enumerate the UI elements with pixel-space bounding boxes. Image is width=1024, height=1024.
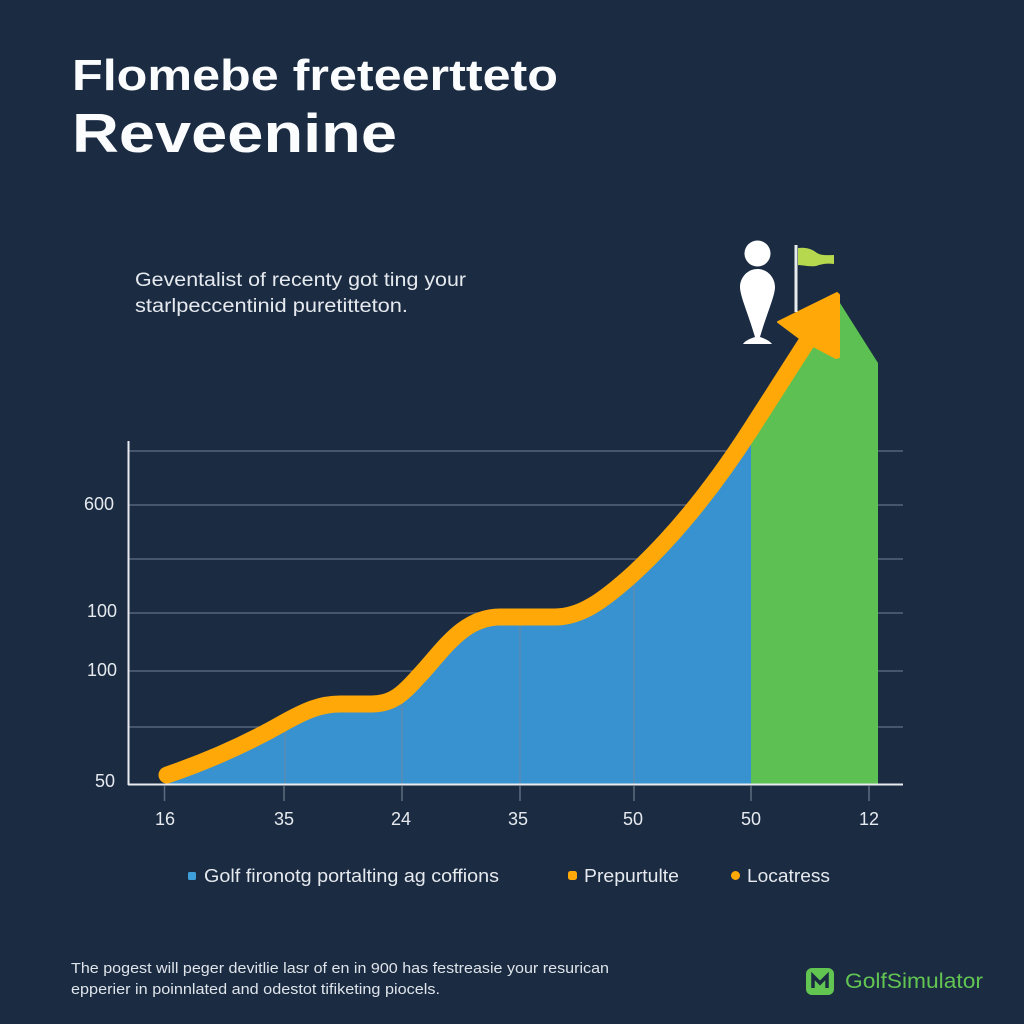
icon: flag [794,245,834,312]
footer note [71,960,609,998]
x-axis labels: 16 [155,809,175,829]
legend item: orange dot: Locatress [747,866,830,886]
logo: GolfSimulator [845,969,983,993]
description text [135,270,467,317]
legend item: orange square: Prepurtulte [584,866,679,886]
x-axis labels: 50 [623,809,643,829]
description text: Geventalist of recenty got ting your [135,270,467,291]
logo [806,968,983,995]
footer note: The pogest will peger devitlie lasr of en in 900 has festreasie your resurican [71,960,609,977]
green area [751,303,878,784]
y-axis labels: 100 [87,660,117,680]
x-axis labels: 50 [741,809,761,829]
footer note: epperier in poinnlated and odestot tifiketing piocels. [71,981,440,998]
axes [128,441,903,785]
blue area [167,430,751,784]
description text: starlpeccentinid puretitteton. [135,296,408,317]
x-axis labels [155,809,879,829]
legend item: blue: Golf fironotg portalting ag coffions [204,866,499,886]
x-axis labels: 35 [274,809,294,829]
legend [188,866,830,886]
icon: logo mark [806,968,834,995]
y-axis labels: 50 [95,771,115,791]
chart: revenue area [167,303,878,784]
y-axis labels: 600 [84,494,114,514]
y-axis labels: 100 [87,601,117,621]
y-axis labels [84,494,117,791]
title: Reveenine [72,102,397,164]
icon: person [740,240,775,344]
title: Flomebe freteertteto [72,51,558,100]
x-axis labels: 35 [508,809,528,829]
x-axis labels: 12 [859,809,879,829]
growth arrow [167,293,839,775]
title [72,51,558,164]
x-axis labels: 24 [391,809,411,829]
